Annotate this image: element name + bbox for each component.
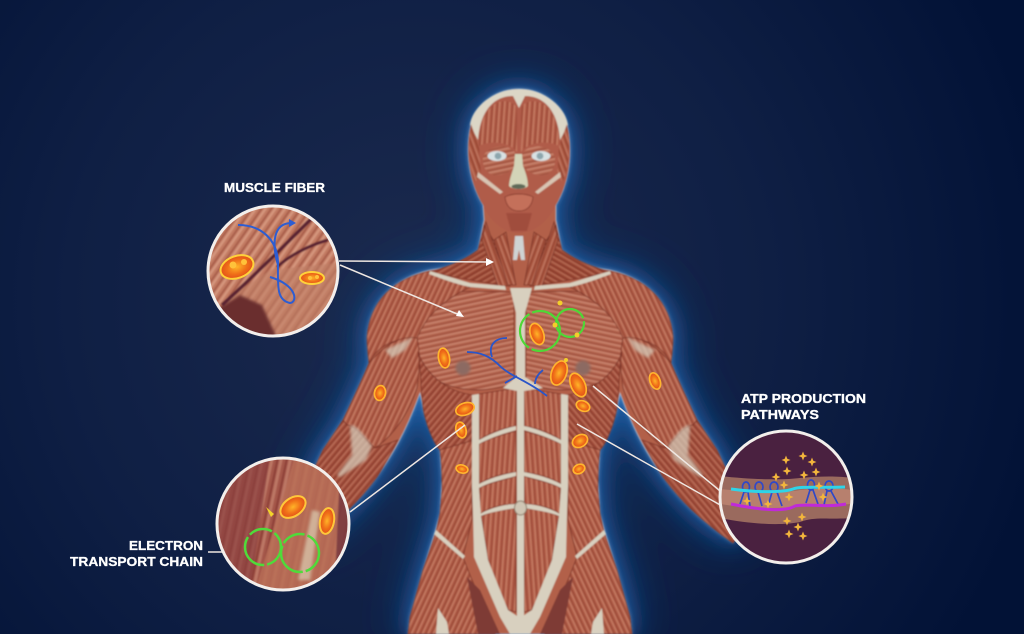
navel: [514, 501, 526, 515]
label: ATP production pathways: ATP PRODUCTION: [741, 392, 866, 406]
blue pathway on chest: [467, 338, 547, 396]
label: muscle fiber: MUSCLE FIBER: [224, 181, 325, 195]
label: electron transport chain: ELECTRON: [129, 539, 203, 553]
right half muscles: [520, 222, 750, 634]
protein loops: [740, 480, 838, 506]
yellow particle: [266, 507, 274, 517]
sternum and linea alba: [503, 288, 543, 634]
nose: [509, 154, 528, 189]
body glow: [290, 89, 750, 634]
blue pathway: [238, 219, 296, 303]
inset: electron transport chain: [215, 456, 355, 592]
eyes: [488, 151, 550, 161]
membranes: [731, 487, 845, 492]
mitochondria: [279, 495, 336, 535]
inset: muscle fiber: [206, 204, 340, 338]
inset: ATP production pathways: [718, 429, 854, 565]
head: [468, 89, 570, 260]
nipples: [456, 360, 590, 376]
green cycle rings on chest: [520, 309, 584, 351]
green rings: [245, 529, 319, 572]
label: ATP production pathways: PATHWAYS: [741, 408, 819, 422]
label: electron transport chain: TRANSPORT CHAIN: [70, 555, 203, 569]
label: electron transport chain: [70, 539, 203, 569]
mitochondria: [217, 251, 324, 284]
ATP stars: [742, 452, 828, 540]
muscular body figure: [290, 89, 750, 634]
leader lines and arrows: [208, 258, 725, 552]
mitochondria on body: [373, 321, 663, 476]
left half muscles: [290, 222, 520, 634]
yellow particles on chest: [552, 300, 580, 362]
label: ATP production pathways: [741, 392, 866, 422]
